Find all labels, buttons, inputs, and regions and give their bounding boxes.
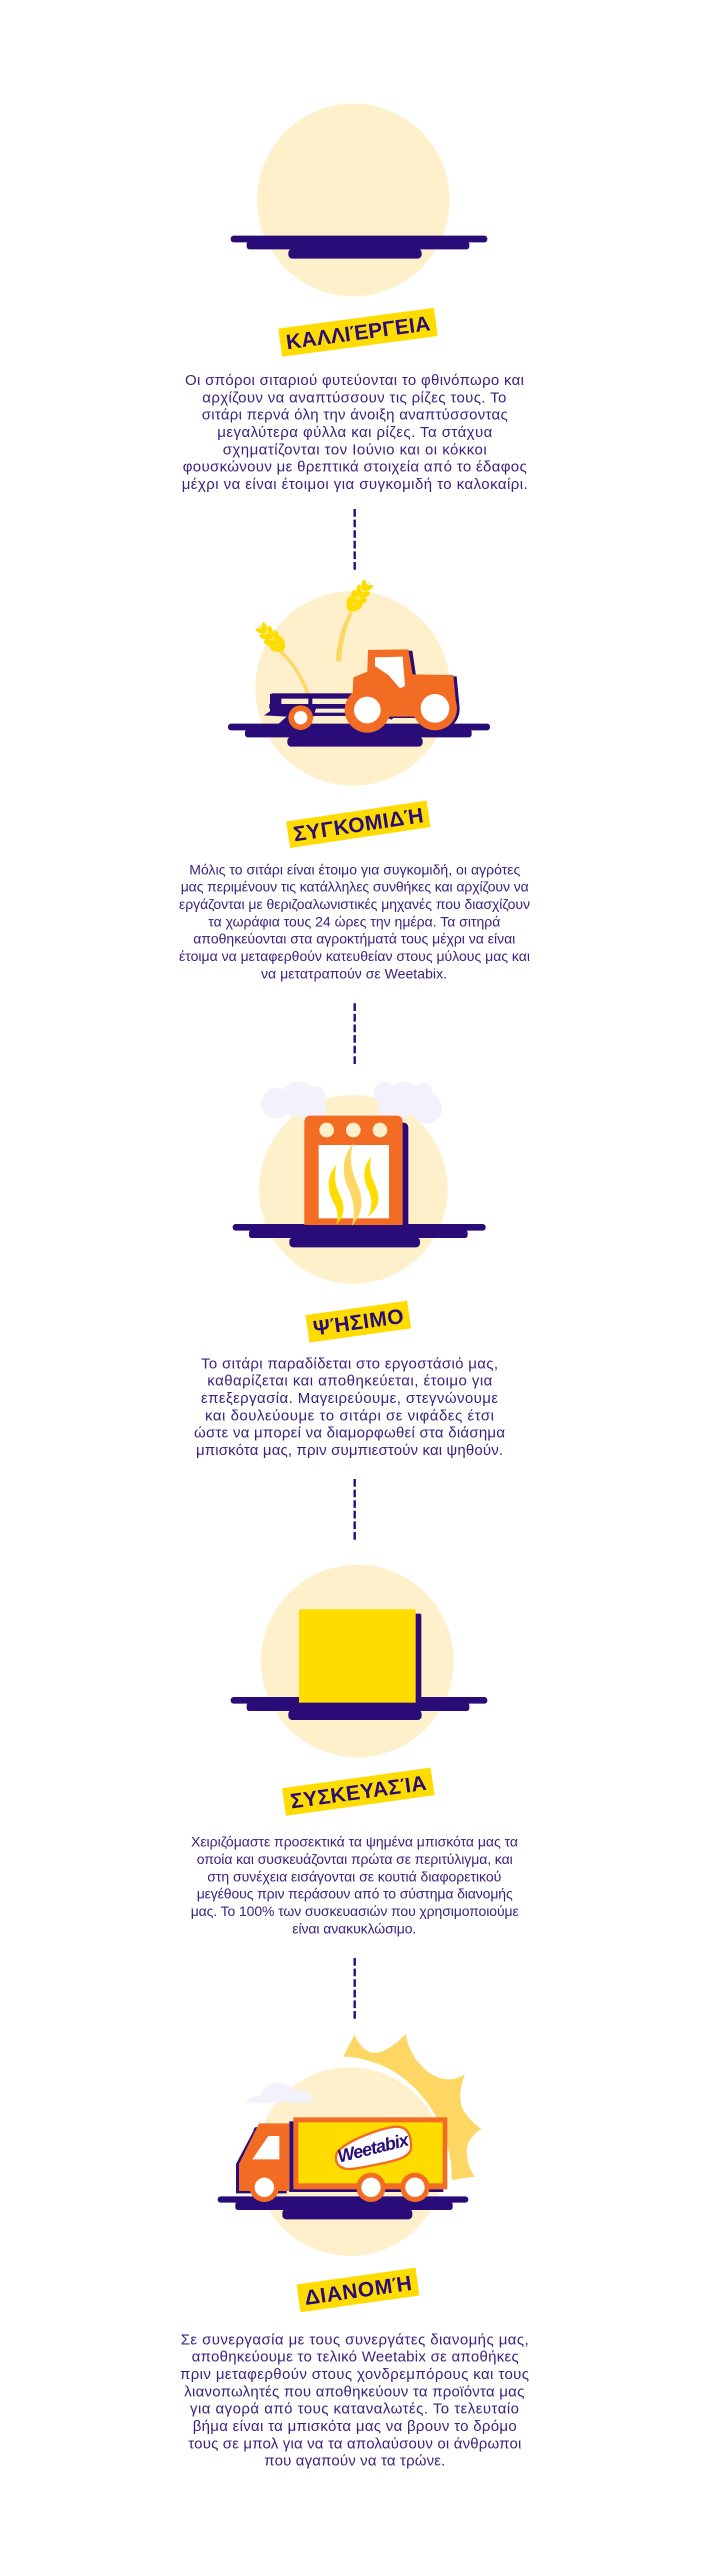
icon: right steam cloud xyxy=(374,1082,442,1124)
icon: Weetabix logo: Weetabix xyxy=(335,2129,412,2167)
illustration: delivery truck with sun xyxy=(218,2034,482,2256)
heading: harvest: ΣΥΓΚΟΜΙΔΉ xyxy=(292,804,425,846)
icon: oven xyxy=(304,1116,408,1229)
text: distribution description xyxy=(180,2331,529,2470)
icon: sun rays xyxy=(343,2034,482,2180)
text: packaging description xyxy=(191,1834,519,1936)
text: distribution description: βήμα είναι τα μπισκότα μας να βρουν το δρόμο xyxy=(193,2418,517,2435)
text: packaging description: είναι ανακυκλώσιμο. xyxy=(292,1920,416,1936)
text: baking description: μπισκότα μας, πριν συμπιεστούν και ψηθούν. xyxy=(196,1442,503,1459)
text: packaging description: στη συνέχεια εισάγονται σε κουτιά διαφορετικού xyxy=(207,1868,501,1884)
text: harvest description: μας περιμένουν τις κατάλληλες συνθήκες και αρχίζουν να xyxy=(181,879,529,895)
text: cultivation description xyxy=(182,372,528,493)
heading: baking: ΨΉΣΙΜΟ xyxy=(312,1305,405,1340)
text: distribution description: που αγαπούν να τα τρώνε. xyxy=(264,2453,445,2470)
icon: trailer xyxy=(264,693,355,730)
heading: distribution: ΔΙΑΝΟΜΉ xyxy=(303,2272,413,2310)
text: cultivation description: σχηματίζονται τον Ιούνιο και οι κόκκοι xyxy=(223,441,487,458)
arrow: dashed connector 4 xyxy=(354,1958,356,2020)
panel: harvest xyxy=(179,576,530,981)
text: cultivation description: αρχίζουν να αναπτύσσουν τις ρίζες τους. Το xyxy=(202,389,506,406)
text: distribution description: Σε συνεργασία με τους συνεργάτες διανομής μας, xyxy=(181,2331,529,2348)
text: baking description: καθαρίζεται και αποθηκεύεται, έτοιμο για xyxy=(207,1373,493,1390)
text: distribution description: αποθηκεύουμε το τελικό Weetabix σε αποθήκες xyxy=(192,2349,519,2366)
arrow: dashed connector 1 xyxy=(354,509,356,571)
text: distribution description: λιανοπωλητές που αποθηκεύουν τα προϊόντα μας xyxy=(184,2383,524,2400)
text: cultivation description: μέχρι να είναι έτοιμοι για συγκομιδή το καλοκαίρι. xyxy=(182,476,528,493)
text: harvest description: τα χωράφια τους 24 ώρες την ημέρα. Τα σιτηρά xyxy=(208,913,500,929)
panel: distribution xyxy=(180,2034,529,2470)
text: baking description: και δουλεύουμε το σιτάρι σε νιφάδες έτσι xyxy=(205,1407,494,1424)
icon: left steam cloud xyxy=(261,1081,327,1123)
illustration: oven with steam xyxy=(233,1081,486,1284)
text: distribution description: για αγορά από τους καταναλωτές. Το τελευταίο xyxy=(190,2401,519,2418)
text: cultivation description: μεγαλύτερα φύλλα και ρίζες. Τα στάχυα xyxy=(217,424,493,441)
text: baking description xyxy=(194,1355,505,1459)
icon: box xyxy=(299,1609,421,1704)
icon: truck xyxy=(236,2117,447,2202)
text: packaging description: Χειριζόμαστε προσεκτικά τα ψημένα μπισκότα μας τα xyxy=(191,1834,518,1850)
arrow: dashed connector 3 xyxy=(354,1479,356,1541)
icon: cloud xyxy=(245,2083,313,2103)
text: harvest description: να μετατραπούν σε Weetabix. xyxy=(261,965,447,981)
arrow: dashed connector 2 xyxy=(354,1003,356,1065)
text: baking description: ώστε να μπορεί να διαμορφωθεί στα διάσημα xyxy=(194,1425,505,1442)
text: harvest description: εργάζονται με θεριζοαλωνιστικές μηχανές που διασχίζουν xyxy=(179,896,530,912)
illustration: sun circle and ground xyxy=(231,104,487,296)
text: harvest description: αποθηκεύονται στα αγροκτήματά τους μέχρι να είναι xyxy=(193,931,515,947)
icon: left wheat stalk xyxy=(251,618,310,694)
panel: baking xyxy=(194,1081,505,1459)
text: distribution description: τους σε μπολ για να τα απολαύσουν οι άνθρωποι xyxy=(188,2435,521,2452)
text: distribution description: πριν μεταφερθούν στους χονδρεμπόρους και τους xyxy=(180,2366,529,2383)
panel: cultivation xyxy=(182,104,528,493)
text: baking description: Το σιτάρι παραδίδεται στο εργοστάσιό μας, xyxy=(201,1355,498,1372)
heading: packaging: ΣΥΣΚΕΥΑΣΊΑ xyxy=(289,1772,428,1813)
text: harvest description: έτοιμα να μεταφερθούν κατευθείαν στους μύλους μας και xyxy=(179,948,530,964)
text: harvest description xyxy=(179,861,530,981)
illustration: yellow box on ground xyxy=(231,1565,487,1757)
panel: packaging xyxy=(191,1565,519,1936)
text: baking description: επεξεργασία. Μαγειρεύουμε, στεγνώνουμε xyxy=(201,1390,498,1407)
illustration: tractor in a field xyxy=(228,576,490,786)
icon: right wheat stalk xyxy=(336,576,378,662)
text: packaging description: οποία και συσκευάζονται πρώτα σε περιτύλιγμα, και xyxy=(197,1851,513,1867)
text: cultivation description: Οι σπόροι σιταριού φυτεύονται το φθινόπωρο και xyxy=(185,372,524,389)
icon: tractor xyxy=(345,649,460,733)
text: cultivation description: φουσκώνουν με θρεπτικά στοιχεία από το έδαφος xyxy=(183,459,527,476)
heading: cultivation: ΚΑΛΛΙΈΡΓΕΙΑ xyxy=(285,312,432,354)
text: harvest description: Μόλις το σιτάρι είναι έτοιμο για συγκομιδή, οι αγρότες xyxy=(189,861,521,877)
text: packaging description: μας. Το 100% των συσκευασιών που χρησιμοποιούμε xyxy=(191,1903,519,1919)
text: cultivation description: σιτάρι περνά όλη την άνοιξη αναπτύσσοντας xyxy=(202,407,508,424)
text: packaging description: μεγέθους πριν περάσουν από το σύστημα διανομής xyxy=(197,1886,513,1902)
